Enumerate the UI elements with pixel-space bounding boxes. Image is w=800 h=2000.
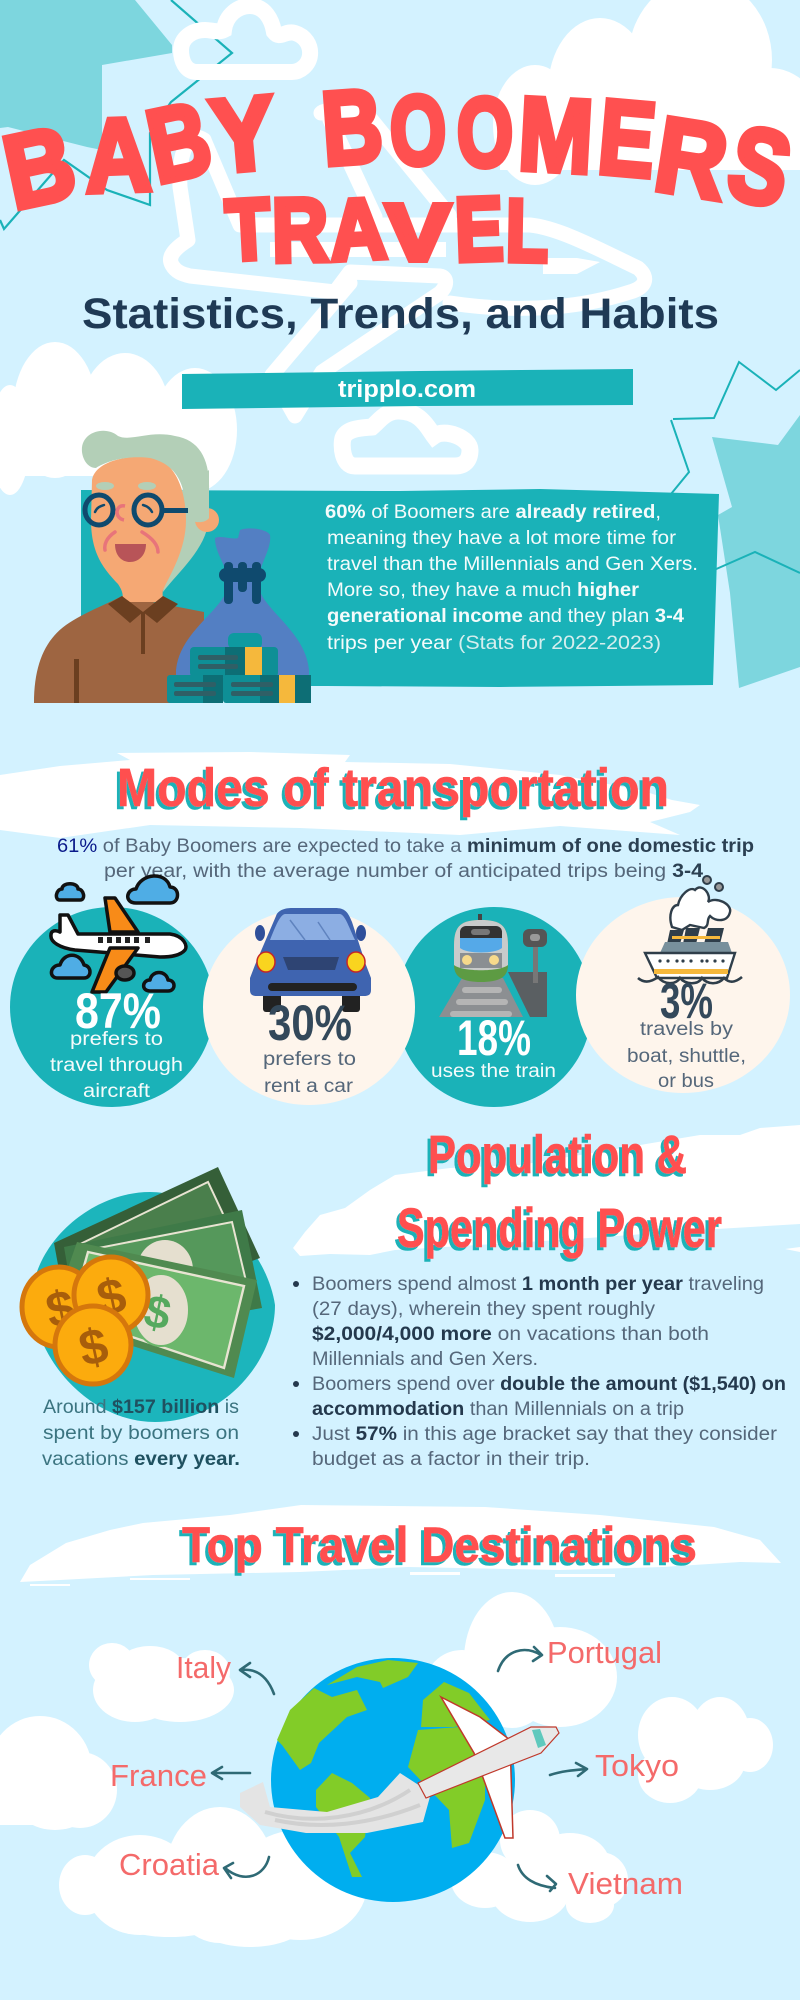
stat: 30% car: 30%: [268, 995, 352, 1051]
title: Baby Boomers Travel: A: [83, 97, 153, 215]
bullet list: spending facts: Just 57% in this age bracket say that they consider: [312, 1424, 778, 1445]
arrow: to Italy: [240, 1663, 274, 1694]
stat: 3% boat: [627, 973, 746, 1092]
intro text: [325, 502, 698, 654]
decorative star top left: [0, 0, 232, 229]
bullet list: spending facts: Boomers spend almost 1 month per year traveling: [312, 1274, 764, 1295]
title: Baby Boomers Travel: R: [648, 95, 735, 223]
title: Baby Boomers Travel: B: [318, 68, 386, 188]
icon: banknotes and coins: [22, 1167, 262, 1384]
paragraph: domestic trips: [57, 836, 754, 882]
bullet list: spending facts: Boomers spend over double the amount ($1,540) on: [312, 1374, 786, 1395]
icon: train: [439, 914, 547, 1017]
stat: 30% car: rent a car: [264, 1076, 354, 1097]
stat: 30% car: prefers to: [263, 1049, 356, 1070]
label: Italy: Italy: [176, 1650, 231, 1685]
stat: 3% boat: travels by: [640, 1019, 734, 1040]
title: Baby Boomers Travel: E: [594, 78, 660, 200]
arrow: to Portugal: [498, 1647, 542, 1671]
text: $157 billion spent: spent by boomers on: [43, 1423, 239, 1444]
title: Baby Boomers Travel: V: [386, 188, 450, 277]
heading: Modes of transportation: Modes of transportation: [117, 758, 669, 818]
heading: Population & Spending Power: Population &: [428, 1125, 687, 1185]
illustration: money bag: [167, 528, 311, 703]
cloud left: [0, 342, 237, 495]
paragraph: domestic trips: per year, with the average number of anticipated trips being 3-4: [104, 861, 703, 882]
icon: banknotes and coins: $: [140, 1284, 176, 1340]
title: Baby Boomers Travel: R: [271, 181, 329, 281]
stat: 87% aircraft: aircraft: [83, 1081, 151, 1102]
bullet list: spending facts: Millennials and Gen Xers.: [312, 1349, 538, 1370]
arrow: to Vietnam: [518, 1865, 556, 1891]
icon: ship: [638, 876, 742, 983]
stat: 30% car: [263, 995, 356, 1097]
title: Baby Boomers Travel: L: [505, 181, 549, 280]
website banner: tripplo.com: [338, 376, 476, 403]
title: Baby Boomers Travel: Y: [206, 74, 280, 196]
label: Croatia: Croatia: [119, 1847, 220, 1882]
plane windows: [270, 242, 600, 274]
intro text: travel than the Millennials and Gen Xers.: [327, 554, 698, 575]
circle: car: [203, 909, 415, 1105]
outline cloud centre: [330, 411, 480, 481]
icon: airplane with clouds: [51, 876, 186, 992]
title: Baby Boomers Travel: T: [224, 181, 273, 279]
title: Baby Boomers Travel: [0, 68, 800, 281]
icon: banknotes and coins: $: [41, 1279, 80, 1339]
stat: 3% boat: 3%: [660, 973, 713, 1029]
bullet list: spending facts: $2,000/4,000 more on vacations than both: [312, 1324, 709, 1345]
illustration: plane circling globe: [240, 1697, 559, 1838]
stat: 87% aircraft: 87%: [75, 983, 161, 1039]
stat: 3% boat: or bus: [658, 1071, 714, 1092]
title: Baby Boomers Travel: B: [138, 80, 221, 206]
text: $157 billion spent: vacations every year.: [42, 1449, 240, 1470]
circle: aircraft: [10, 907, 214, 1107]
brush: modes heading background: [0, 752, 700, 838]
panel: retirement intro: [81, 489, 719, 687]
bullet list: spending facts: (27 days), wherein they spent roughly: [312, 1299, 656, 1320]
subtitle: Statistics, Trends, and Habits: [82, 290, 719, 338]
brush: destinations heading background: [20, 1505, 781, 1586]
label: Vietnam: Vietnam: [568, 1866, 683, 1901]
title: Baby Boomers Travel: O: [456, 77, 514, 187]
icon: car: [250, 908, 371, 1012]
intro text: 60% of Boomers are already retired ,: [325, 502, 661, 523]
stat: 87% aircraft: travel through: [50, 1055, 183, 1076]
illustration: globe: [271, 1658, 515, 1902]
arrow: to France: [212, 1767, 250, 1779]
title: Baby Boomers Travel: M: [516, 76, 596, 196]
bullet list: spending facts: budget as a factor in their trip.: [312, 1449, 590, 1470]
outline cloud top: [181, 6, 310, 72]
blob: money background: [32, 1192, 275, 1422]
intro text: generational income and they plan 3-4: [327, 606, 684, 627]
intro text: trips per year (Stats for 2022-2023): [327, 633, 661, 654]
stat: 87% aircraft: prefers to: [70, 1029, 163, 1050]
title: Baby Boomers Travel: E: [453, 179, 505, 281]
text: $157 billion spent: [42, 1397, 240, 1470]
illustration: boomer man: [34, 431, 219, 703]
heading: Population & Spending Power: [397, 1125, 722, 1259]
paragraph: domestic trips: 61% of Baby Boomers are expected to take a minimum of one domestic trip: [57, 836, 754, 857]
label: Tokyo: Tokyo: [595, 1748, 679, 1783]
icon: banknotes and coins: $: [74, 1317, 113, 1377]
stat: 3% boat: boat, shuttle,: [627, 1046, 746, 1067]
stat: 87% aircraft: [50, 983, 183, 1102]
title: Baby Boomers Travel: O: [388, 74, 448, 186]
stat: 18% train: 18%: [457, 1010, 531, 1066]
stat: 18% train: [431, 1010, 556, 1082]
heading: Top Travel Destinations: Top Travel Destinations: [182, 1517, 697, 1573]
title: Baby Boomers Travel: A: [328, 181, 389, 279]
arrow: to Croatia: [224, 1857, 269, 1878]
intro text: More so, they have a much higher: [327, 580, 640, 601]
bullet list: spending facts: accommodation than Millennials on a trip: [312, 1399, 684, 1420]
brush: population heading background: [293, 1125, 800, 1256]
circle: boat: [576, 897, 790, 1093]
decorative star right: [671, 362, 800, 688]
label: France: France: [110, 1758, 207, 1793]
cloud top right: [493, 0, 800, 185]
icon: banknotes and coins: $: [92, 1267, 131, 1327]
background plane outline: [171, 110, 645, 416]
intro text: meaning they have a lot more time for: [327, 528, 677, 549]
arrow: to Tokyo: [550, 1763, 587, 1776]
circle: train: [396, 907, 592, 1107]
label: Portugal: Portugal: [547, 1635, 662, 1670]
stat: 18% train: uses the train: [431, 1061, 556, 1082]
website banner: [182, 369, 633, 409]
clouds: destinations background: [0, 1592, 773, 1947]
bullet list: spending facts: [293, 1274, 786, 1470]
text: $157 billion spent: Around $157 billion is: [43, 1397, 239, 1418]
